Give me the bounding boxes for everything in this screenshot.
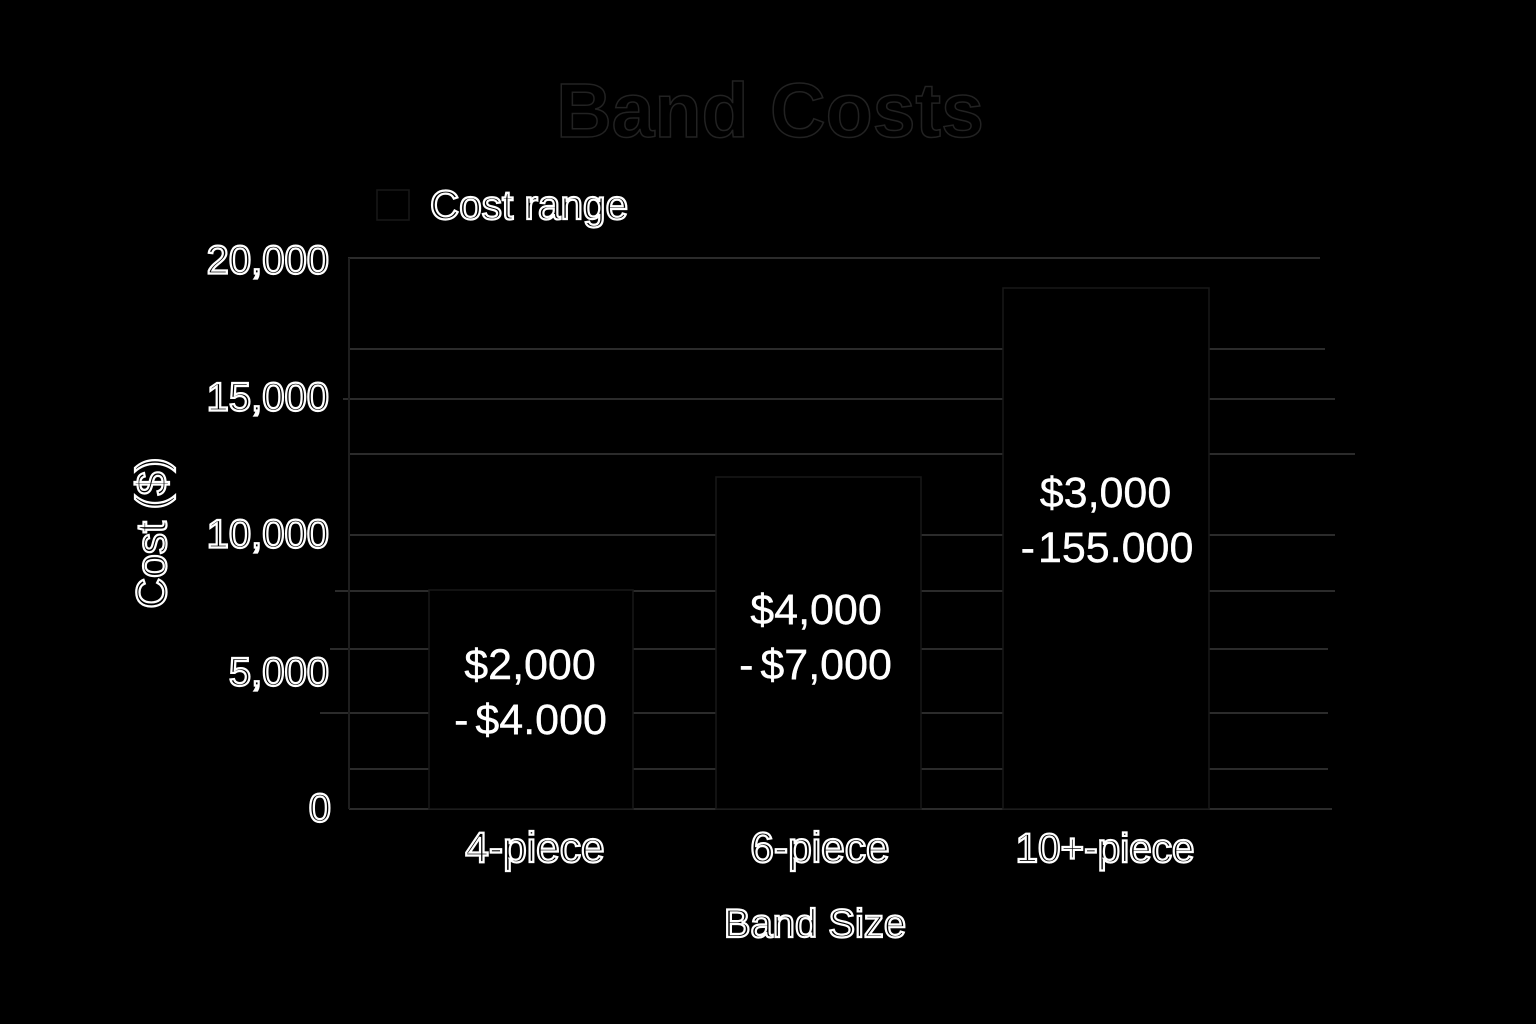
- x axis category labels: 10+-piece: [1015, 825, 1195, 871]
- value label: 10+-piece: $3,000: [1040, 469, 1171, 517]
- y axis title: Cost ($): [129, 457, 176, 609]
- value label: 10+-piece: -155.000: [1021, 524, 1193, 572]
- x axis category labels: 6-piece: [750, 825, 890, 872]
- x axis category labels: [465, 825, 1195, 872]
- y axis tick labels: 20,000: [207, 238, 329, 282]
- bar: 6-piece: [716, 477, 921, 809]
- value label: 4-piece: $2,000: [464, 641, 596, 689]
- x axis category labels: 4-piece: [465, 825, 605, 872]
- legend swatch: [377, 190, 409, 220]
- title: Band Costs: [556, 68, 984, 154]
- bar: 10+-piece: [1003, 288, 1209, 809]
- y axis tick labels: 5,000: [229, 650, 329, 694]
- legend label: Cost range: [430, 182, 628, 228]
- x axis title: Band Size: [724, 902, 906, 946]
- value label: 4-piece: -$4.000: [454, 696, 607, 744]
- y axis tick labels: 15,000: [207, 376, 329, 420]
- value label: 6-piece: -$7,000: [739, 641, 892, 689]
- gridlines and y axis: [320, 258, 1355, 809]
- y axis tick labels: [207, 238, 331, 830]
- value label: 6-piece: $4,000: [750, 586, 882, 634]
- legend: [377, 182, 628, 228]
- y axis tick labels: 0: [309, 786, 331, 830]
- y axis tick labels: 10,000: [207, 512, 329, 556]
- bar: 4-piece: [429, 590, 633, 809]
